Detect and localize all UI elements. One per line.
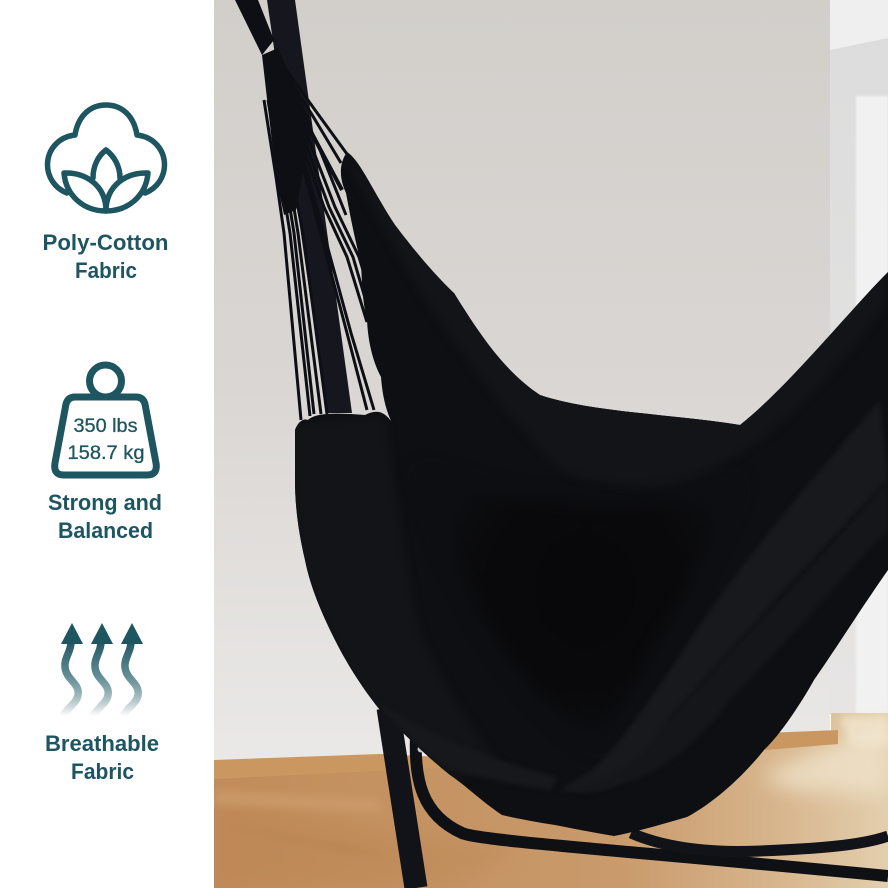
heading: poly-cotton fabric: Fabric: [75, 258, 137, 283]
feature: poly-cotton fabric: [42, 105, 168, 283]
weight capacity: 350 lbs: [74, 416, 138, 437]
weight capacity: 158.7 kg: [68, 443, 144, 464]
panel: feature sidebar: [0, 0, 214, 888]
fabric folds: [285, 150, 888, 792]
panel: product photo: [214, 0, 888, 888]
hanging ropes: [235, 0, 379, 420]
heading: strong and balanced: Strong and: [48, 490, 162, 515]
stand pole upper: [267, 0, 352, 413]
heading: poly-cotton fabric: Poly-Cotton: [42, 230, 168, 255]
heading: poly-cotton fabric: [42, 230, 168, 283]
back wall: [214, 0, 830, 765]
wooden floor: [214, 713, 888, 888]
heading: strong and balanced: [48, 490, 162, 543]
weight capacity: [68, 416, 144, 464]
icon: cotton boll: [48, 105, 164, 211]
icon: rising air arrows: [61, 623, 143, 716]
feature: strong and balanced: [48, 365, 162, 543]
heading: breathable fabric: Fabric: [71, 759, 134, 784]
stand lower frame: [388, 708, 888, 888]
feature: breathable fabric: [45, 623, 159, 784]
heading: strong and balanced: Balanced: [58, 518, 153, 543]
heading: breathable fabric: Breathable: [45, 731, 159, 756]
baseboard: [214, 730, 838, 779]
hammock fabric: [295, 152, 888, 836]
icon: weight: [55, 365, 156, 475]
right wall section: [830, 0, 888, 714]
heading: breathable fabric: [45, 731, 159, 784]
